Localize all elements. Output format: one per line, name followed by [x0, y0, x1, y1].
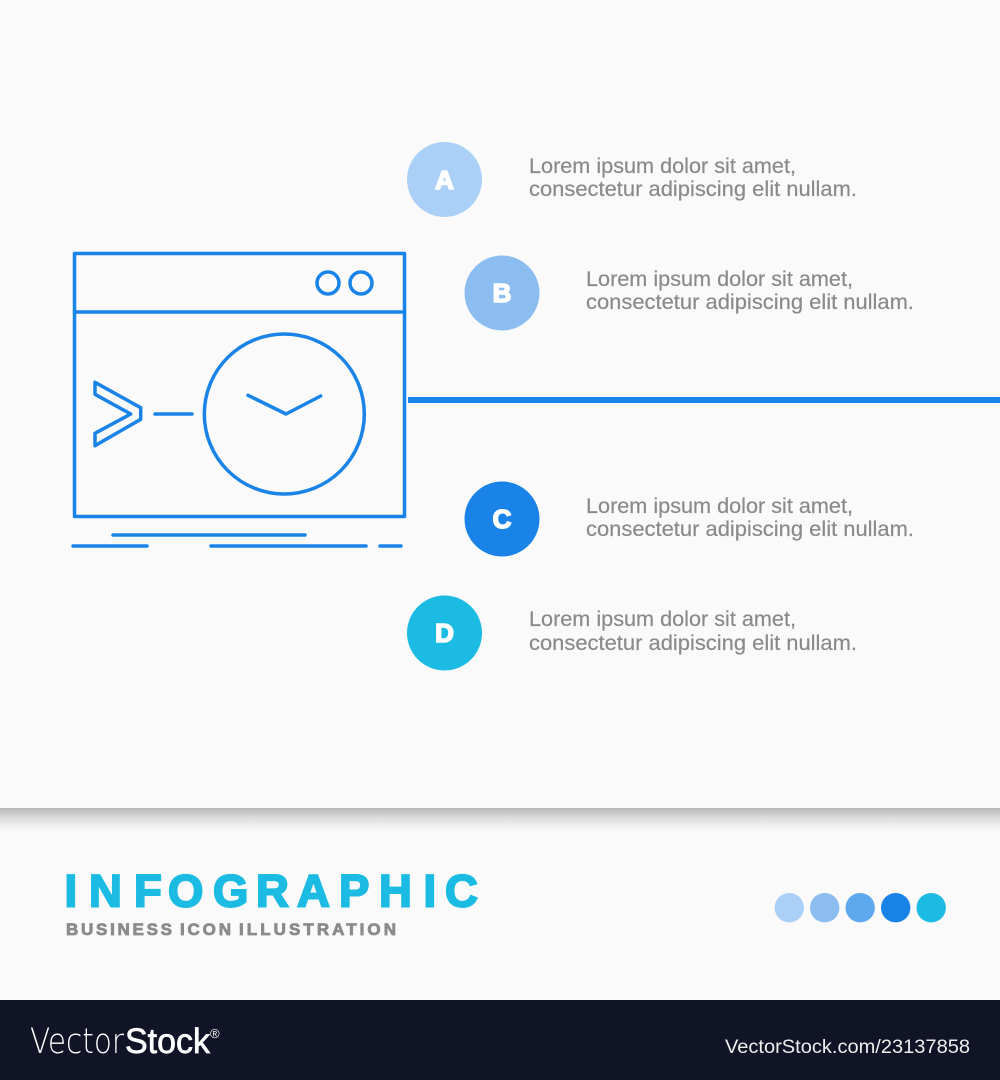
step A [407, 142, 857, 217]
step C [464, 482, 914, 556]
colour dots [775, 893, 946, 922]
step D: consectetur adipiscing elit nullam. [529, 632, 857, 655]
step B: consectetur adipiscing elit nullam. [586, 291, 914, 314]
step C: Lorem ipsum dolor sit amet, [586, 495, 853, 518]
icon: terminal window with clock [73, 254, 404, 546]
step D: D [435, 618, 454, 648]
step A: A [435, 165, 454, 195]
shadow band [0, 808, 1000, 831]
subtitle: ILLUSTRATION [239, 920, 396, 939]
footer url: VectorStock.com/23137858 [725, 1037, 970, 1058]
logo: VectorStock: Stock [125, 1022, 210, 1061]
subtitle [66, 920, 396, 939]
step A: Lorem ipsum dolor sit amet, [529, 155, 796, 178]
step D: Lorem ipsum dolor sit amet, [529, 608, 796, 631]
step B: Lorem ipsum dolor sit amet, [586, 268, 853, 291]
connector line [408, 397, 1000, 403]
step C: C [493, 504, 512, 534]
step C: consectetur adipiscing elit nullam. [586, 518, 914, 541]
step A: consectetur adipiscing elit nullam. [529, 178, 857, 201]
title: INFOGRAPHIC [64, 866, 478, 916]
step B: B [493, 278, 511, 308]
step B [464, 256, 914, 330]
subtitle: BUSINESS [66, 920, 172, 939]
logo: VectorStock [30, 1022, 220, 1062]
logo: VectorStock: ® [210, 1026, 220, 1041]
footer bar [0, 1000, 1000, 1080]
logo: VectorStock: Vector [30, 1022, 125, 1062]
step D [407, 596, 857, 670]
subtitle: ICON [180, 920, 231, 939]
